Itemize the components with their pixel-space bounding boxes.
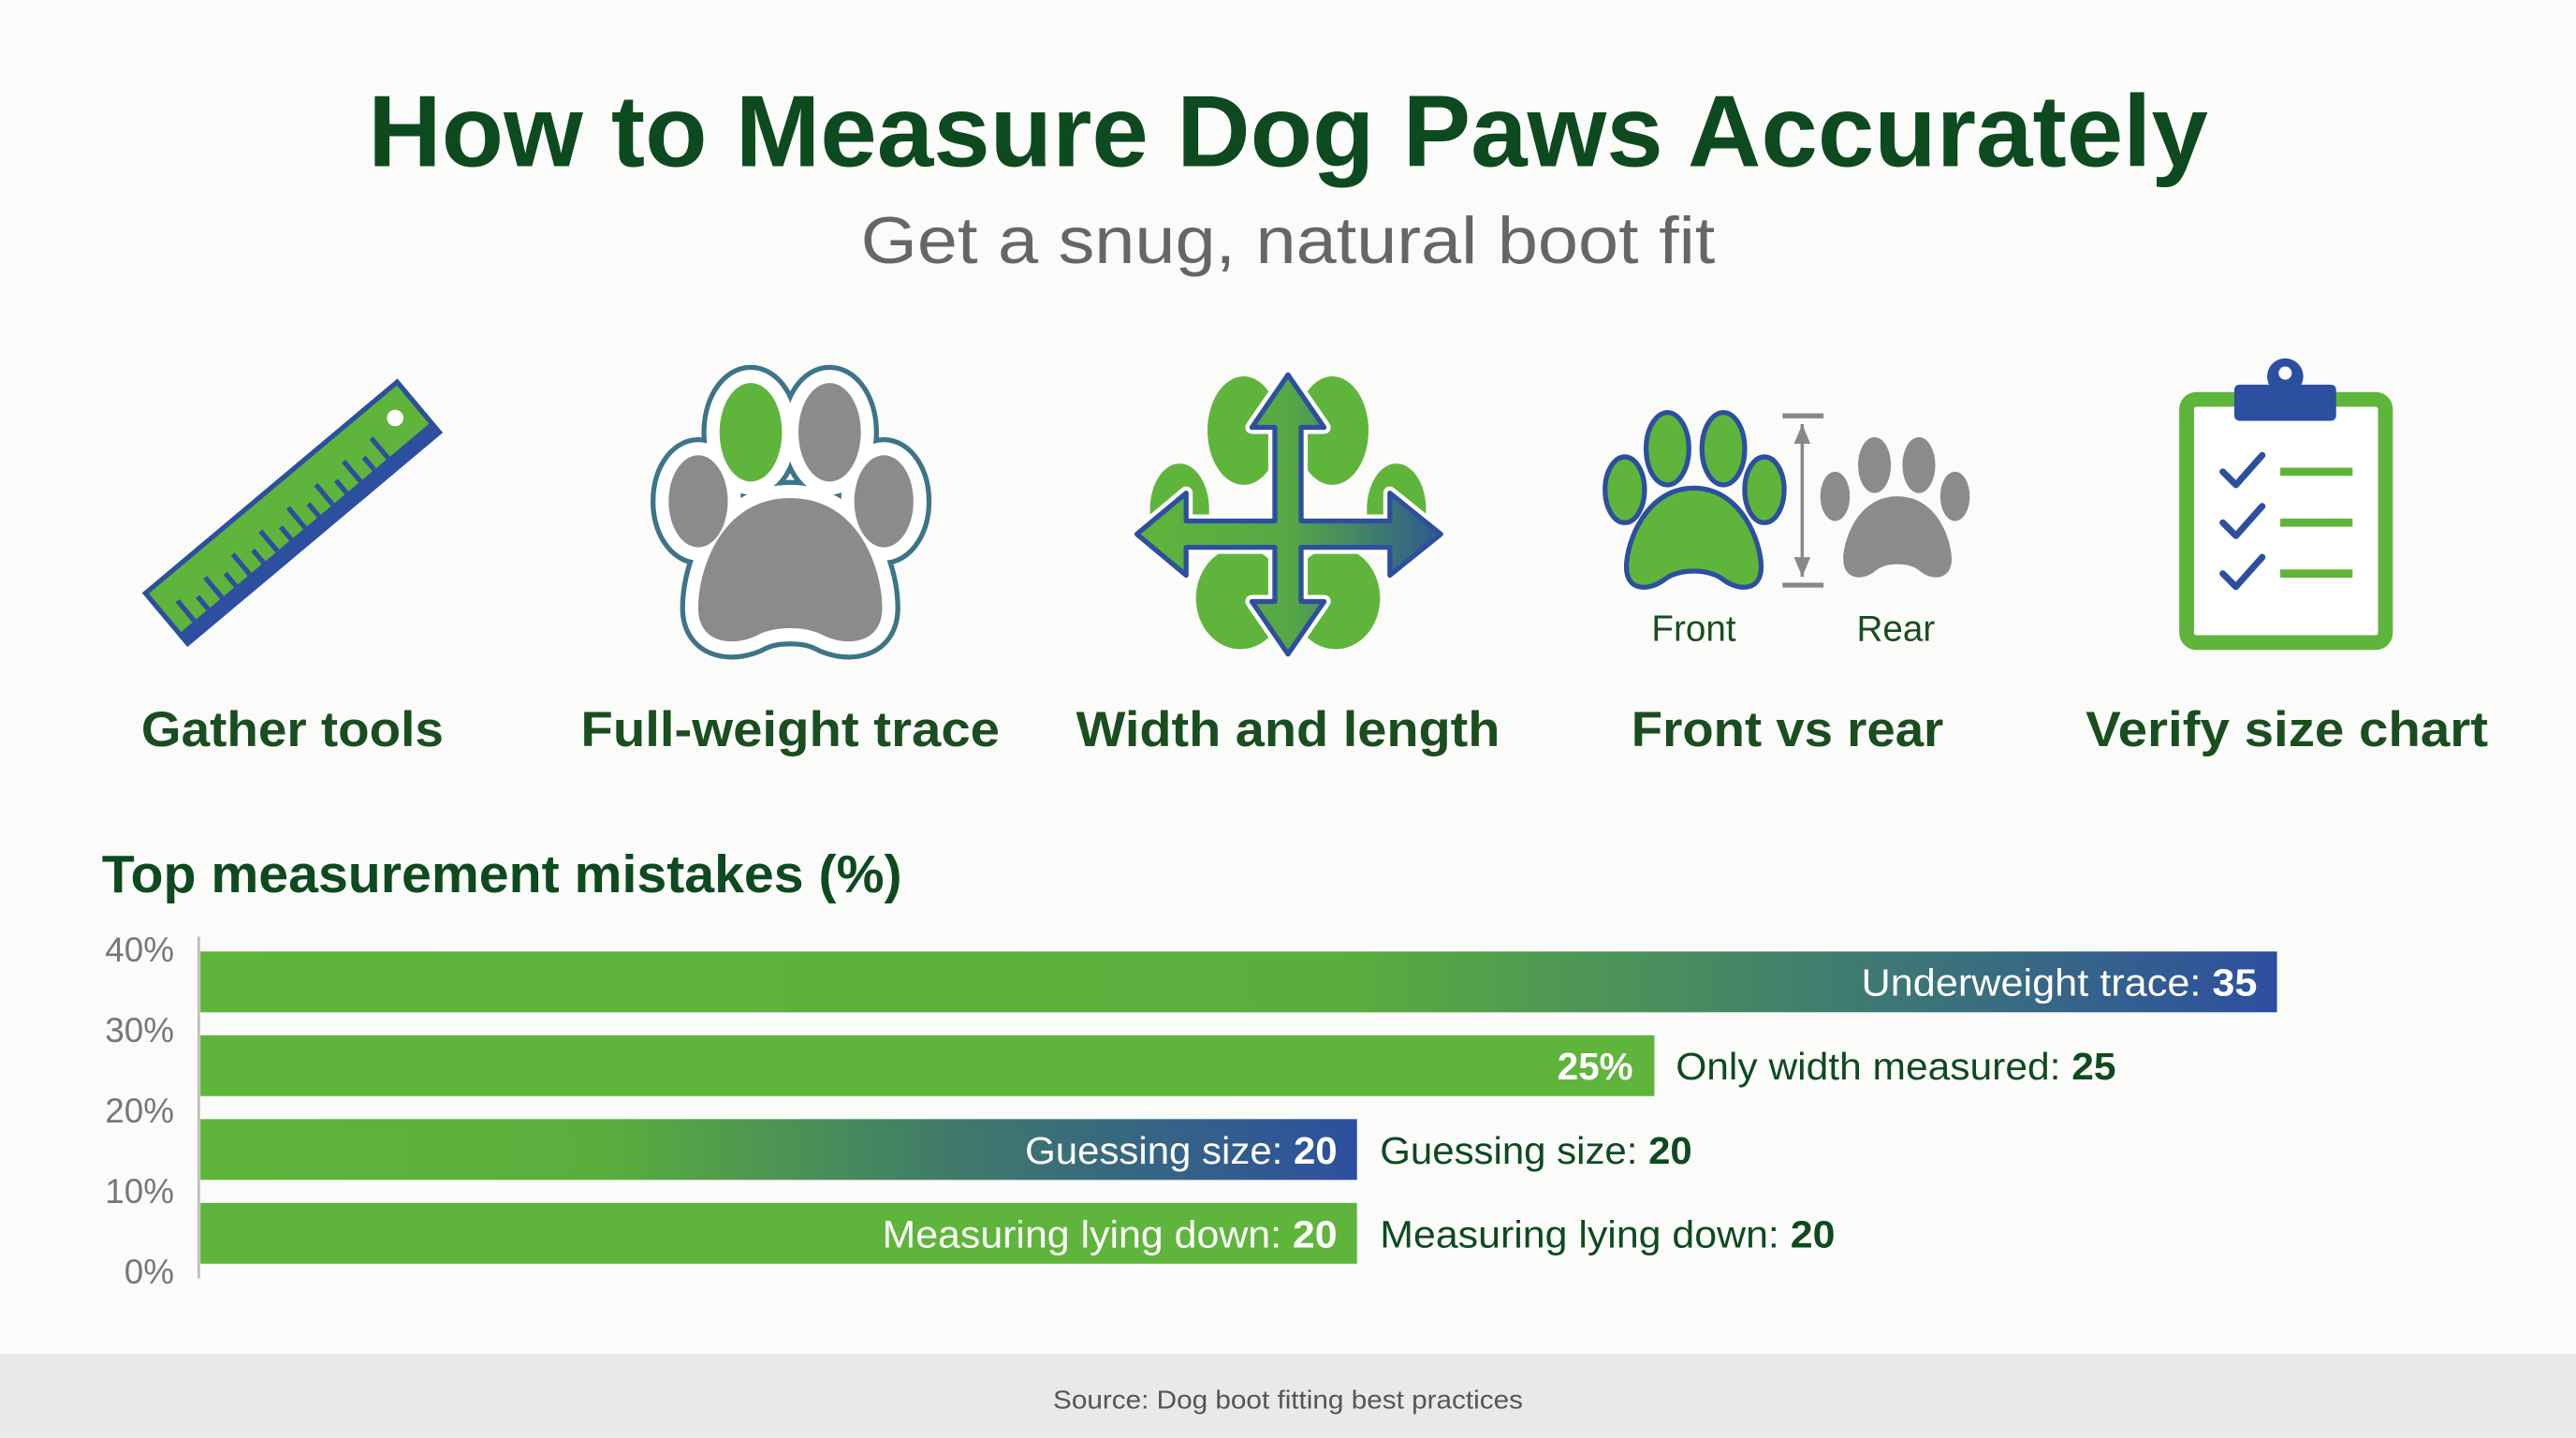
icon: front vs rear paws [1605, 413, 1969, 650]
bar chart: Underweight trace: 35 [1862, 961, 2258, 1005]
footer [0, 1354, 2576, 1438]
label: gather tools: Gather tools [141, 702, 444, 757]
icon: width and length arrows over paw [1137, 374, 1441, 654]
chart title: Top measurement mistakes (%) [102, 844, 902, 903]
subtitle: Get a snug, natural boot fit [861, 203, 1715, 277]
bar chart: 40% [105, 931, 174, 969]
bar chart: Measuring lying down: 20 [882, 1212, 1338, 1255]
bar chart: 0% [124, 1253, 174, 1291]
title: How to Measure Dog Paws Accurately [368, 74, 2208, 188]
bar chart: 25% [1558, 1045, 1633, 1088]
bar chart: 20% [105, 1092, 174, 1130]
icon: ruler [145, 382, 439, 643]
label: front vs rear: Front vs rear [1632, 702, 1943, 757]
bar chart: Measuring lying down: 20 [1380, 1212, 1835, 1255]
bar chart: Guessing size: 20 [1380, 1129, 1692, 1172]
label: width and length: Width and length [1076, 702, 1500, 757]
icon: front vs rear paws: Rear [1857, 609, 1935, 650]
icon: full-weight paw trace [668, 383, 914, 641]
bar chart: 30% [105, 1011, 174, 1049]
label: full-weight trace: Full-weight trace [580, 702, 1000, 757]
label: verify size chart: Verify size chart [2086, 702, 2488, 757]
icon: front vs rear paws: Front [1651, 609, 1736, 650]
bar chart [105, 931, 2277, 1291]
bar chart: Guessing size: 20 [1025, 1129, 1338, 1172]
footer: Source: Dog boot fitting best practices [1053, 1385, 1523, 1414]
icon: clipboard checklist [2187, 359, 2385, 642]
bar chart: 10% [105, 1172, 174, 1211]
bar chart: Only width measured: 25 [1676, 1045, 2116, 1088]
